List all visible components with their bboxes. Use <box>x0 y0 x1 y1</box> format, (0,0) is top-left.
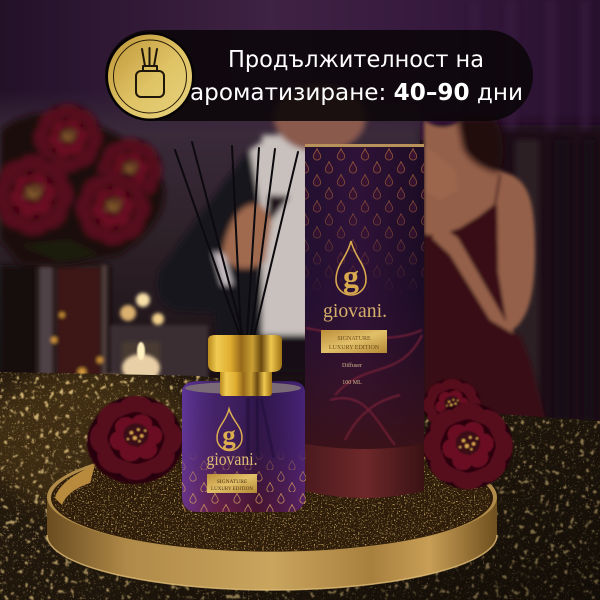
bouquet of dark red peonies <box>0 104 165 265</box>
bottle gold cap <box>208 335 282 372</box>
bottle gold label: LUXURY EDITION <box>211 487 253 492</box>
tube caption: Diffuser <box>342 362 362 369</box>
glass body <box>182 381 305 512</box>
vase and candles <box>35 264 208 390</box>
tube base band <box>305 444 424 498</box>
heading badge <box>105 30 533 121</box>
bottle drop pattern <box>182 450 306 512</box>
diffuser reeds <box>175 142 298 336</box>
tube gold label: LUXURY EDITION <box>329 345 380 351</box>
icon: gold medallion with reed diffuser <box>106 32 194 121</box>
tube logo drop: g <box>343 258 359 294</box>
tube gold label: SIGNATURE <box>337 336 371 342</box>
gold tray <box>47 440 497 590</box>
candle lights <box>98 293 208 387</box>
gift tube <box>305 144 424 498</box>
tube drop pattern <box>305 148 424 300</box>
tube gold label <box>321 330 387 353</box>
bottle logo <box>217 409 242 450</box>
tube logo drop <box>336 241 366 295</box>
glitter table <box>0 370 600 600</box>
diffuser bottle <box>182 335 306 512</box>
heading line 1: Продължителност на <box>228 47 484 73</box>
tray rim band <box>47 497 497 590</box>
tube smoke swirls <box>306 328 422 445</box>
tube volume: 100 ML <box>342 380 362 386</box>
bottle logo: g <box>222 420 236 450</box>
blurred couple <box>158 84 546 420</box>
dark pill <box>105 30 533 121</box>
heading line 2: ароматизиране: 40–90 дни <box>190 80 523 106</box>
tube brand name: giovani. <box>323 300 387 322</box>
man: suit and shirt <box>158 84 366 372</box>
bottle gold label: SIGNATURE <box>217 479 248 485</box>
bottle neck <box>220 370 272 396</box>
woman: hair, skin, dress <box>424 118 546 420</box>
bottle brand name: giovani. <box>206 449 258 469</box>
peonies right of tube <box>423 379 513 489</box>
tray glitter floor <box>51 444 493 552</box>
glass vase <box>35 264 108 390</box>
bottle gold label <box>207 474 257 493</box>
small peony on tray left <box>87 396 183 484</box>
